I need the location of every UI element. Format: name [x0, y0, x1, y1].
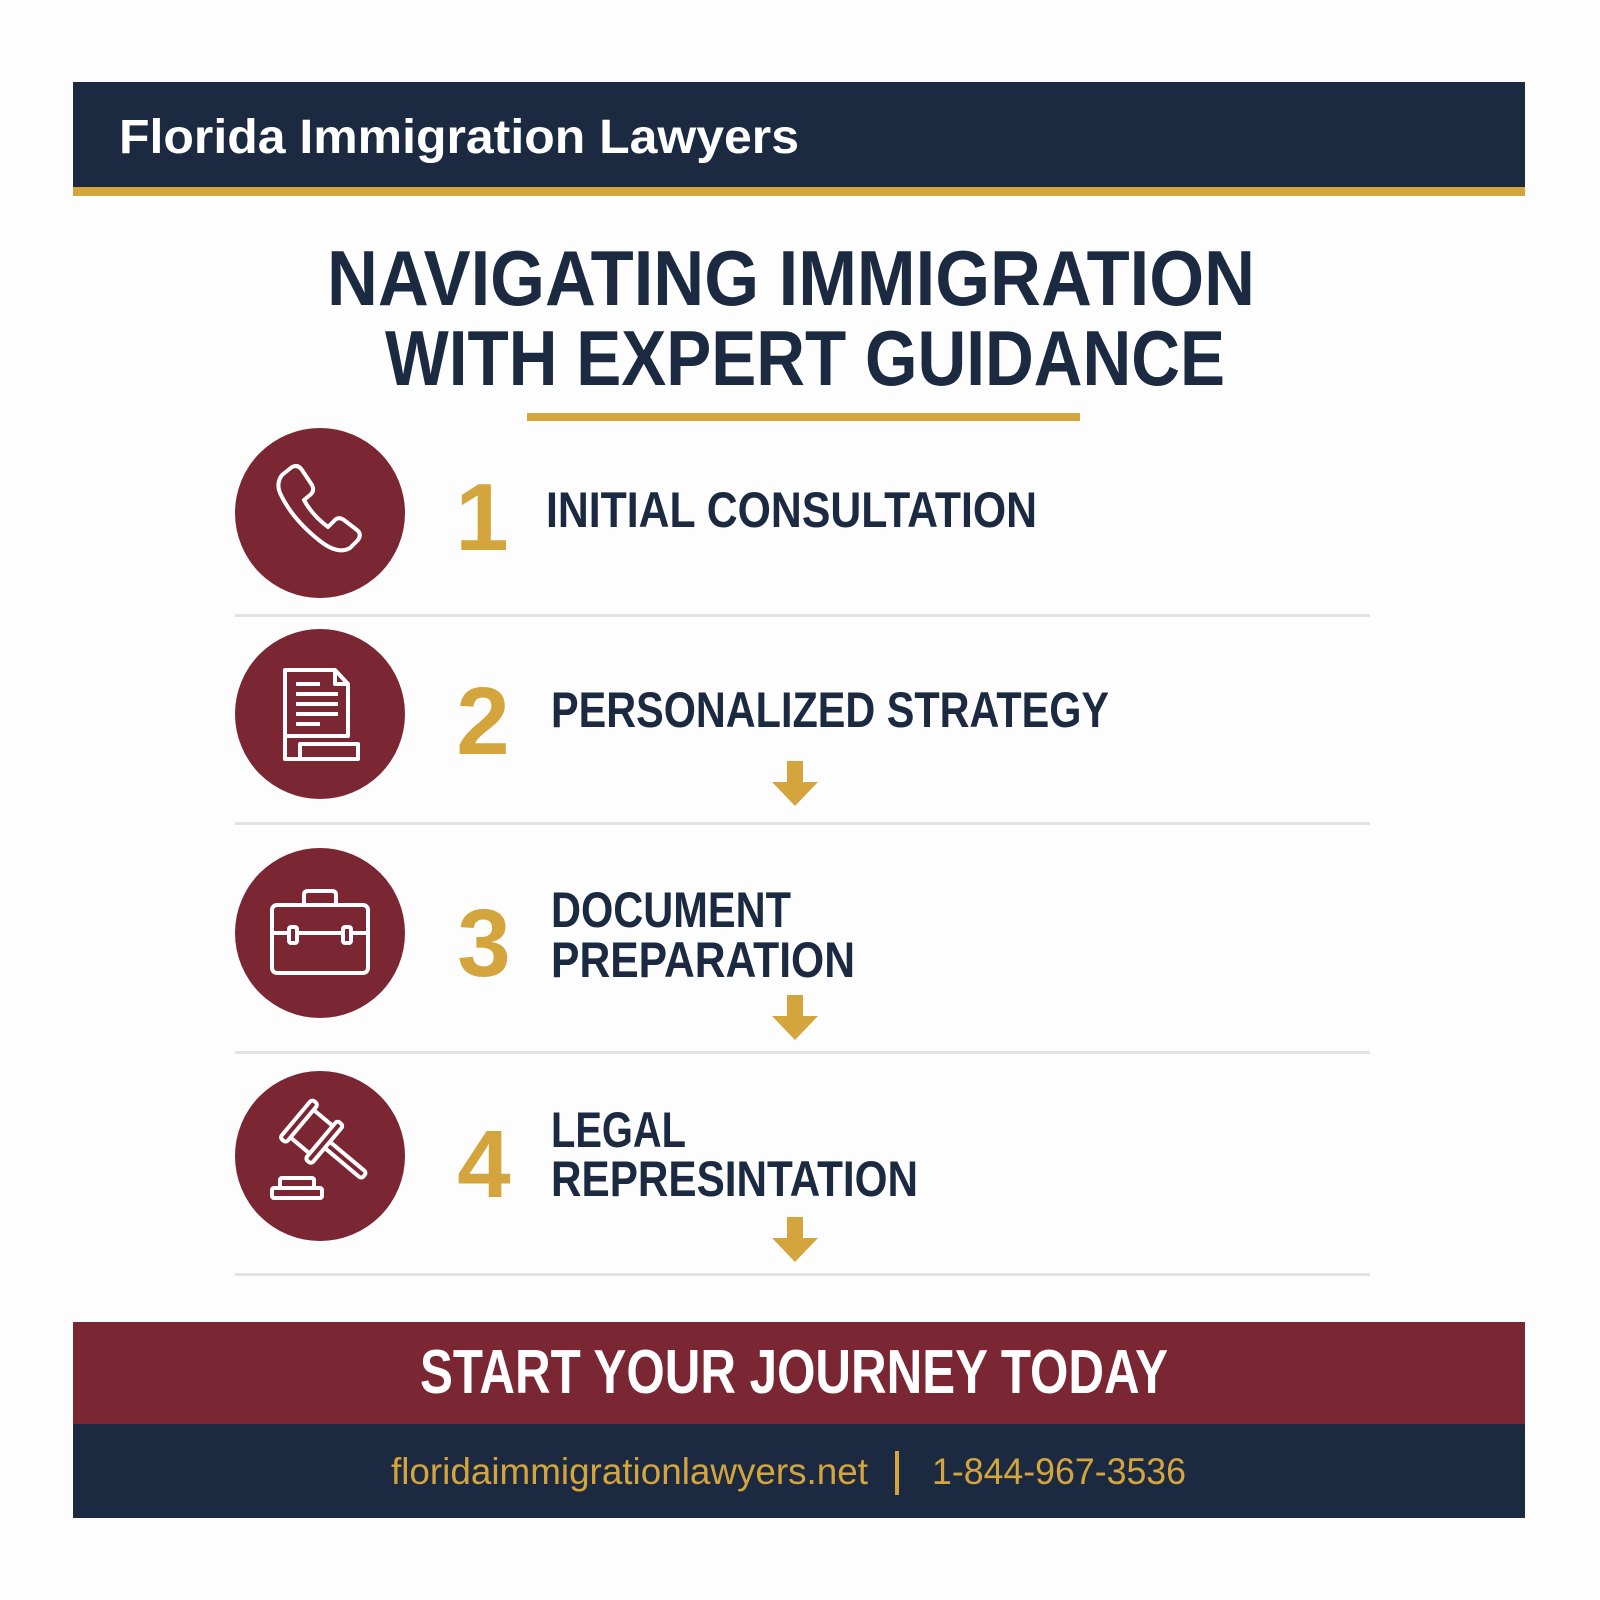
step 3	[235, 848, 855, 1040]
title: WITH EXPERT GUIDANCE	[385, 314, 1225, 402]
title underline	[527, 413, 1080, 421]
header text: Florida Immigration Lawyers	[119, 111, 799, 164]
icon: briefcase	[235, 848, 405, 1018]
label: document preparation: PREPARATION	[551, 932, 855, 988]
arrow	[772, 1217, 818, 1262]
arrow	[772, 995, 818, 1040]
icon: gavel	[235, 1071, 405, 1241]
label: document preparation: DOCUMENT	[551, 882, 791, 938]
label: document preparation	[551, 882, 855, 988]
number 2: 2	[456, 668, 510, 775]
CTA banner: START YOUR JOURNEY TODAY	[420, 1338, 1168, 1407]
footer contact bar: 1-844-967-3536	[932, 1451, 1186, 1492]
footer contact bar	[73, 1424, 1525, 1518]
CTA banner	[73, 1322, 1525, 1425]
step 4	[235, 1071, 918, 1262]
number 3: 3	[457, 890, 511, 997]
number 4: 4	[457, 1111, 511, 1218]
title	[327, 234, 1255, 402]
number 1: 1	[455, 464, 509, 571]
label: legal representation: LEGAL	[551, 1102, 686, 1158]
dividers	[235, 614, 1370, 1276]
icon: document	[235, 629, 405, 799]
label: initial consultation: INITIAL CONSULTATION	[546, 482, 1037, 538]
footer contact bar: floridaimmigrationlawyers.net	[391, 1451, 869, 1492]
step 1	[235, 428, 1037, 598]
label: legal representation	[551, 1102, 918, 1207]
arrow	[772, 761, 818, 806]
label: personalized strategy: PERSONALIZED STRATEGY	[551, 682, 1109, 738]
label: legal representation: REPRESINTATION	[551, 1151, 918, 1207]
icon: phone	[235, 428, 405, 598]
step 2	[235, 629, 1109, 806]
title: NAVIGATING IMMIGRATION	[327, 234, 1255, 322]
header bar	[73, 82, 1525, 196]
